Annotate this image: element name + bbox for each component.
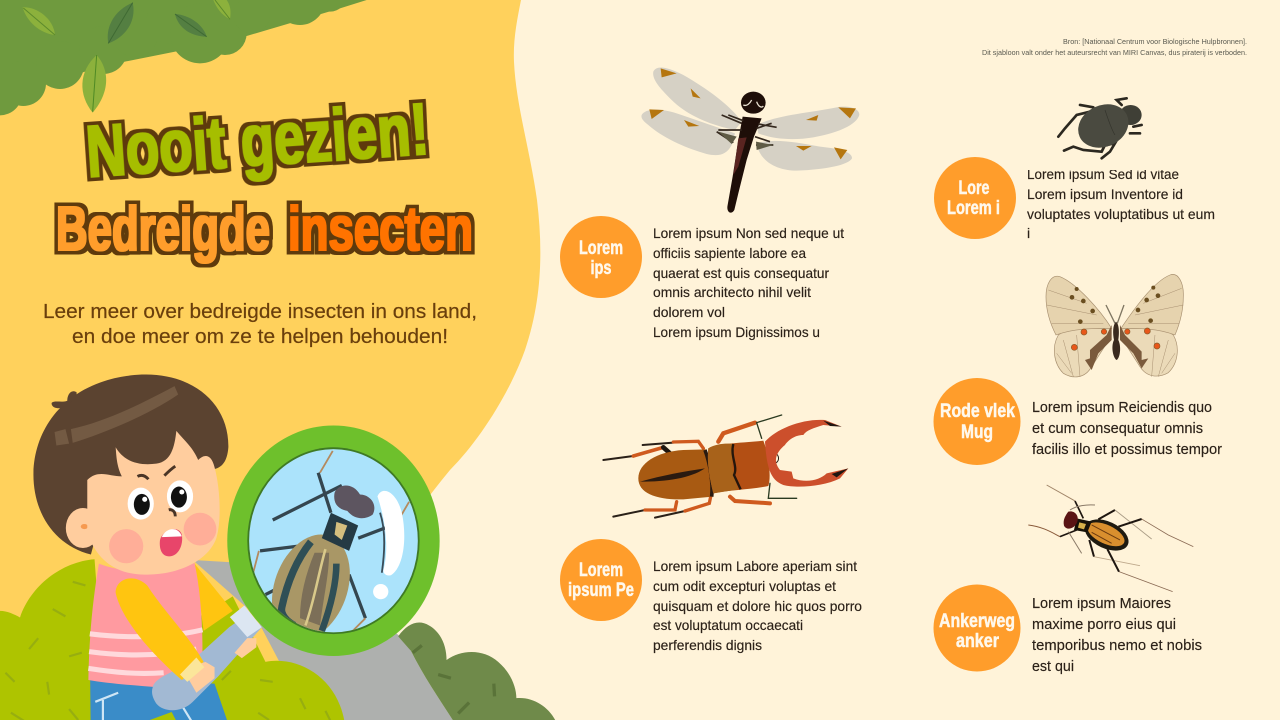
insect: stag beetle (603, 415, 848, 518)
cheeks (109, 513, 216, 563)
hair highlight (55, 386, 178, 445)
badge: Rode vlek Mug (934, 378, 1020, 465)
insect: ground beetle (1028, 485, 1193, 592)
badge: Ankerweg anker: Ankerweg (939, 611, 1015, 632)
abdomen (638, 449, 713, 499)
face (87, 431, 220, 575)
mouth (160, 529, 182, 556)
wings (641, 68, 859, 171)
lime bush (0, 559, 346, 720)
tree canopy (0, 0, 367, 115)
badge: Lorem ips (560, 216, 642, 298)
back sleeve (195, 564, 233, 631)
text: butterfly description: Lorem ipsum Reiciendis quo (1032, 399, 1212, 416)
front sleeve (116, 578, 204, 680)
thorax (1074, 518, 1092, 532)
handle (152, 605, 262, 710)
text: stag beetle description: quisquam et dolore hic quos porro (653, 598, 862, 614)
badge: Lorem ipsum Pe (560, 539, 642, 621)
insect: butterfly (1046, 274, 1183, 377)
hands (189, 638, 256, 693)
head (1064, 511, 1078, 529)
text: butterfly description: et cum consequatur omnis (1032, 420, 1203, 437)
text: dung beetle description: Lorem ipsum Inventore id (1027, 186, 1183, 202)
left wings (1046, 276, 1112, 377)
beetle in lens (253, 451, 409, 651)
leaf: top right (213, 0, 231, 19)
rock (193, 560, 473, 720)
brown spots (1070, 286, 1160, 324)
badge: Lorem ipsum Pe: Lorem (579, 560, 623, 581)
text: dung beetle description: i (1027, 225, 1030, 241)
text: dragonfly description: officiis sapiente labore ea (653, 245, 806, 261)
text: dragonfly description: quaerat est quis consequatur (653, 265, 829, 281)
source note: Bron: [Nationaal Centrum voor Biologische Hulpbronnen]. (1063, 37, 1247, 46)
badge: Lorem ipsum Pe: ipsum Pe (568, 580, 634, 601)
text: stag beetle description: perferendis dignis (653, 637, 762, 653)
badge: Lore Lorem i (934, 157, 1016, 239)
insect: dragonfly (641, 68, 859, 213)
badge: Lore Lorem i: Lorem i (947, 198, 1000, 219)
cuff (180, 657, 204, 682)
leaf: hanging (82, 55, 106, 113)
text: stag beetle description: est voluptatum occaecati (653, 617, 803, 633)
text: dragonfly description: dolorem vol (653, 304, 725, 320)
wing case (1080, 513, 1133, 557)
leaf: dark right (175, 14, 207, 37)
wing spots (649, 68, 856, 159)
text: dung beetle description: Lorem ipsum Sed id vitae (1027, 166, 1179, 182)
leaf: light left (23, 7, 55, 35)
text: ground beetle description (1032, 595, 1202, 675)
ear (66, 508, 100, 548)
hair back (33, 374, 228, 555)
body (717, 92, 777, 213)
eyes (128, 480, 193, 520)
body (1106, 305, 1124, 360)
text: dragonfly description: Lorem ipsum Dignissimos u (653, 324, 820, 340)
text: butterfly description (1032, 399, 1222, 458)
title: Nooit gezien: Nooit gezien! (84, 89, 431, 193)
text: dung beetle description: voluptates voluptatibus ut eum (1027, 206, 1215, 222)
right wings (1121, 274, 1183, 377)
source note: Dit sjabloon valt onder het auteursrecht van MIRI Canvas, dus piraterij is verboden. (982, 48, 1247, 57)
wing brown bands (1085, 325, 1148, 370)
word: Bedreigde: Bedreigde (56, 195, 270, 264)
eyebrows and nose (137, 466, 175, 516)
lens glare dot (373, 584, 388, 599)
subtitle: en doe meer om ze te helpen behouden! (72, 326, 448, 348)
badge: Rode vlek Mug: Rode vlek (940, 401, 1015, 422)
subtitle (43, 301, 477, 348)
badge: Ankerweg anker: anker (956, 631, 1000, 652)
thorax (708, 441, 770, 493)
antennae and legs (1028, 485, 1193, 592)
leaf: dark middle (108, 3, 134, 43)
text: dragonfly description: Lorem ipsum Non sed neque ut (653, 225, 844, 241)
subtitle: Leer meer over bedreigde insecten in ons land, (43, 301, 477, 323)
illustration: boy with magnifying glass (0, 374, 562, 720)
text: stag beetle description (653, 558, 862, 653)
insect: dung beetle (1058, 96, 1142, 158)
text: ground beetle description: temporibus nemo et nobis (1032, 637, 1202, 654)
text: dung beetle description (1027, 166, 1215, 241)
text: stag beetle description: cum odit excepturi voluptas et (653, 578, 836, 594)
hair tuft (52, 391, 77, 408)
text: stag beetle description: Lorem ipsum Labore aperiam sint (653, 558, 857, 574)
text: ground beetle description: maxime porro eius qui (1032, 616, 1176, 633)
shirt (88, 563, 203, 687)
dark bush (398, 623, 562, 720)
text: dragonfly description: omnis architecto nihil velit (653, 284, 811, 300)
text: butterfly description: facilis illo et possimus tempor (1032, 441, 1222, 458)
text: ground beetle description: est qui (1032, 658, 1074, 675)
badge: Ankerweg anker (934, 584, 1020, 672)
text: dragonfly description (653, 225, 844, 340)
word: insecten: insecten (288, 195, 473, 264)
orange spots (1071, 328, 1160, 350)
legs (603, 415, 797, 518)
mandibles (765, 420, 848, 487)
magnifier lens and frame (227, 425, 440, 656)
badge: Lorem ips: ips (590, 258, 612, 279)
badge: Lore Lorem i: Lore (958, 178, 990, 199)
badge: Lorem ips: Lorem (579, 238, 623, 259)
lens glare (377, 491, 404, 575)
title: Bedreigde insecten (56, 195, 473, 264)
source note (982, 37, 1247, 57)
badge: Rode vlek Mug: Mug (961, 422, 993, 443)
trousers (90, 680, 238, 720)
yellow left panel (0, 0, 540, 720)
text: ground beetle description: Lorem ipsum Maiores (1032, 595, 1171, 612)
